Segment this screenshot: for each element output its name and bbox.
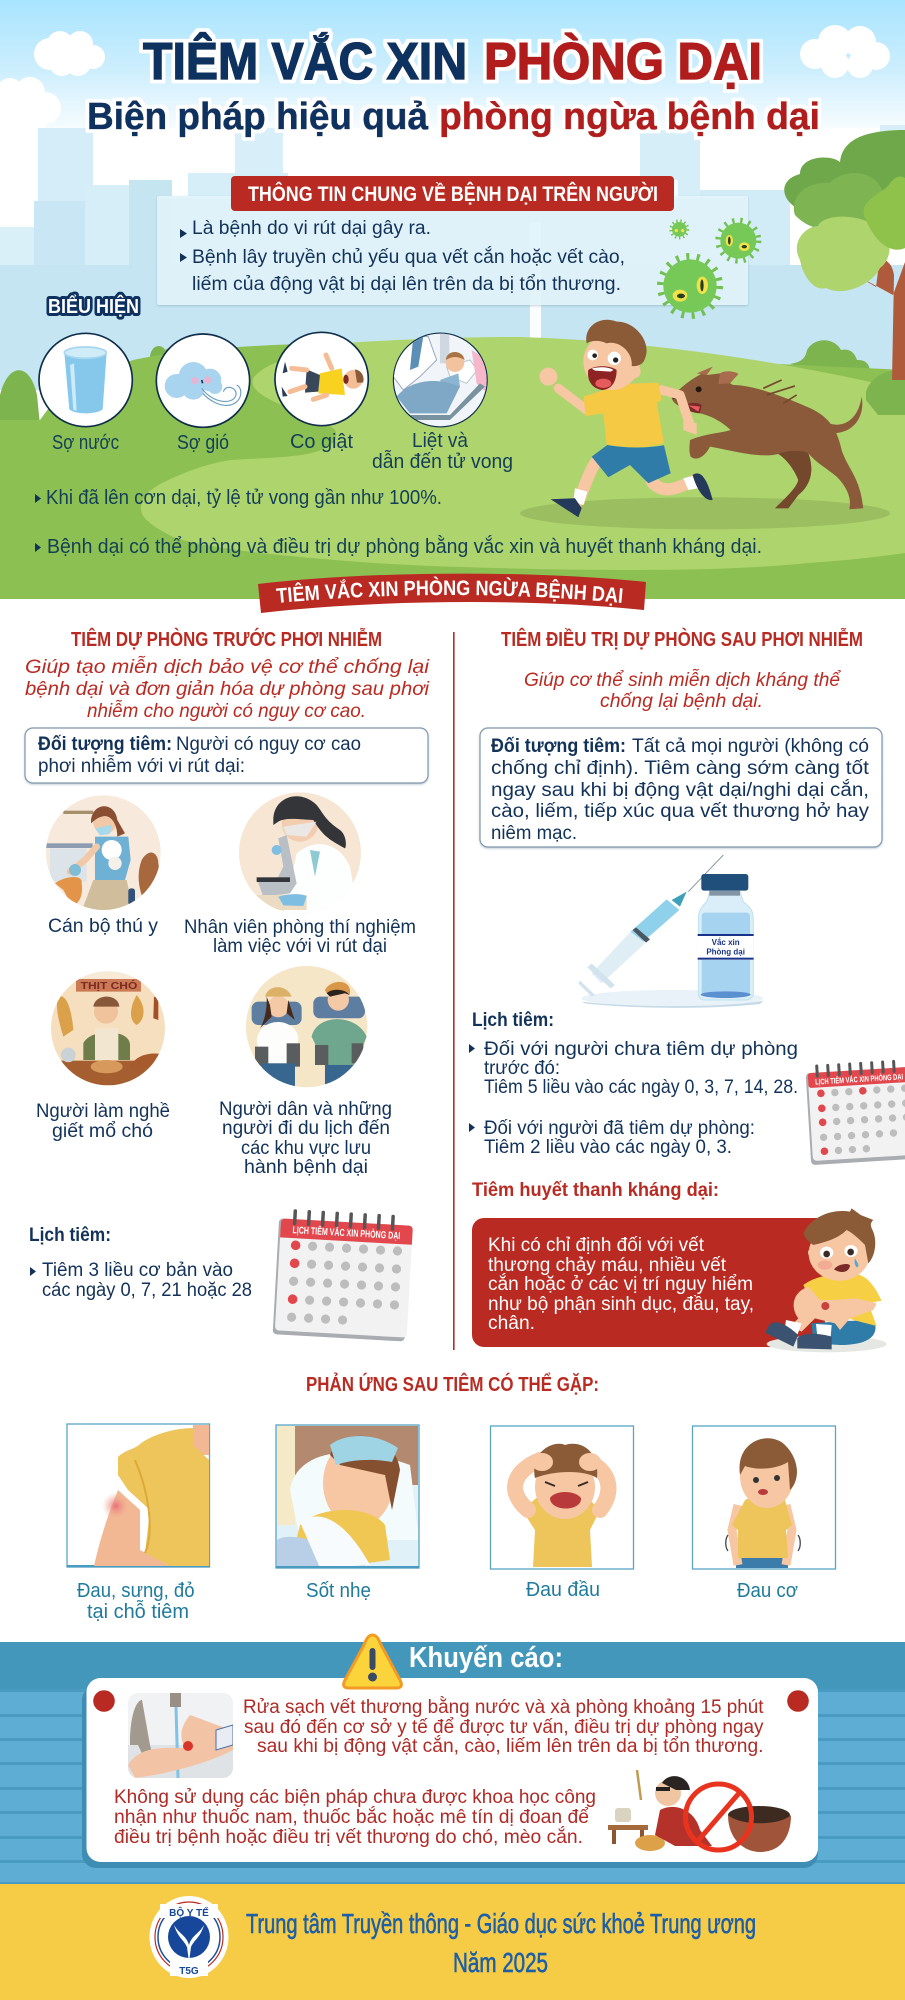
icon: warning triangle [344, 1635, 401, 1688]
callout: rabies immune globulin: thương chảy máu, nhiều vết [488, 1255, 727, 1276]
people at risk labels: người đi du lịch đến [222, 1118, 390, 1139]
reaction: injection site: Đau, sưng, đỏ [77, 1580, 194, 1602]
schedule: pre-exposure [29, 1225, 252, 1301]
illustration: shaman and forbidden remedy [608, 1770, 791, 1852]
title: TIÊM VẮC XIN [143, 32, 467, 91]
callout: rabies immune globulin: Tiêm huyết thanh kháng dại: [472, 1180, 719, 1201]
text: avoid unproven remedies: điều trị bệnh hoặc điều trị vết thương do chó, mèo cắn. [114, 1826, 583, 1848]
people at risk labels: Cán bộ thú y [48, 916, 158, 937]
icon: paralysis patient in bed [393, 333, 487, 427]
schedule: post-exposure: Đối với người chưa tiêm dự phòng [484, 1039, 798, 1060]
logo: Ministry of Health: BỘ Y TẾ [169, 1906, 209, 1919]
white content background [0, 599, 905, 1642]
illustration: boy running [539, 320, 713, 517]
symptoms row [39, 332, 487, 427]
icon: water glass [39, 333, 132, 427]
schedule: pre-exposure: các ngày 0, 7, 21 hoặc 28 [42, 1280, 252, 1301]
callout: rabies immune globulin: chân. [488, 1313, 535, 1334]
people at risk labels: làm việc với vi rút dại [213, 936, 387, 957]
footer: Năm 2025 [453, 1947, 548, 1978]
text: wash wound: sau đó đến cơ sở y tế để được tư vấn, điều trị dự phòng ngay [244, 1717, 764, 1738]
text: avoid unproven remedies: Không sử dụng các biện pháp chưa được khoa học công [114, 1787, 596, 1808]
schedule: pre-exposure: Tiêm 3 liều cơ bản vào [42, 1260, 233, 1281]
icon: viruses [661, 221, 758, 315]
illustration: crying boy [765, 1208, 887, 1352]
schedule: post-exposure: Tiêm 2 liều vào các ngày 0, 3. [484, 1137, 732, 1158]
text: avoid unproven remedies: nhận như thuốc nam, thuốc bắc hoặc mê tín dị đoan để [114, 1806, 589, 1828]
clouds [0, 25, 890, 128]
people at risk labels: Nhân viên phòng thí nghiệm [184, 917, 416, 938]
illustration: dog [671, 367, 863, 509]
people at risk labels: các khu vực lưu [241, 1138, 371, 1159]
reaction: headache [490, 1426, 634, 1601]
icon: calendar right [805, 1058, 905, 1165]
illustration: lab worker [237, 790, 363, 917]
panel: pre-exposure prophylaxis: Giúp tạo miễn dịch bảo vệ cơ thể chống lại [25, 657, 430, 678]
people at risk illustrations [43, 790, 370, 1090]
panel: general information: Bệnh lây truyền chủ yếu qua vết cắn hoặc vết cào, [192, 246, 625, 268]
reaction: injection site [67, 1424, 210, 1623]
vial [698, 874, 754, 1000]
callout: rabies immune globulin [472, 1180, 825, 1347]
heading: symptoms: BIỂU HIỆN [48, 294, 139, 318]
panel: post-exposure prophylaxis: chống lại bệnh dại. [600, 691, 763, 712]
panel: pre-exposure prophylaxis: Đối tượng tiêm: [38, 734, 172, 755]
illustration: dog biting boy [520, 320, 890, 529]
icon: calendar left [273, 1208, 413, 1342]
symptom labels: Liệt và [412, 430, 469, 452]
symptom labels: Sợ gió [177, 432, 229, 454]
section: recommendations background [0, 1642, 905, 1885]
illustration: veterinarian [43, 793, 163, 913]
schedule: post-exposure [469, 1010, 798, 1158]
panel: post-exposure prophylaxis: Giúp cơ thể sinh miễn dịch kháng thể [524, 670, 841, 691]
heading: recommendations: Khuyến cáo: [409, 1642, 563, 1674]
panel: post-exposure prophylaxis: niêm mạc. [491, 823, 577, 844]
panel: pre-exposure prophylaxis: TIÊM DỰ PHÒNG TRƯỚC PHƠI NHIỄM [71, 627, 382, 651]
banner: vaccination heading: TIÊM VẮC XIN PHÒNG NGỪA BỆNH DẠI [276, 576, 623, 606]
panel: post-exposure prophylaxis: Đối tượng tiêm: [491, 736, 626, 757]
callout: rabies immune globulin: cắn hoặc ở các vị trí nguy hiểm [488, 1273, 753, 1295]
symptom labels [52, 430, 513, 473]
illustration: travellers [243, 963, 370, 1090]
panel: recommendations card [82, 1678, 818, 1868]
panel: pre-exposure prophylaxis: phơi nhiễm với vi rút dại: [38, 755, 245, 777]
symptom labels: Co giật [290, 431, 353, 453]
text: wash wound: sau khi bị động vật cắn, cào, liếm lên trên da bị tổn thương. [257, 1735, 764, 1757]
note: prevention: Bệnh dại có thể phòng và điều trị dự phòng bằng vắc xin và huyết thanh kháng dại. [47, 535, 762, 558]
reaction: muscle pain: Đau cơ [737, 1580, 798, 1602]
icon: calendar left: LỊCH TIÊM VẮC XIN PHÒNG DẠI [292, 1223, 401, 1242]
text: wash wound [243, 1696, 764, 1757]
panel: post-exposure prophylaxis: ngay sau khi bị động vật dại/nghi dại cắn, [491, 779, 869, 801]
footer [0, 1884, 905, 2000]
subtitle [87, 96, 820, 138]
text: avoid unproven remedies [114, 1787, 596, 1848]
symptom labels: Sợ nước [52, 432, 119, 454]
panel: general information [157, 176, 748, 305]
panel: post-exposure prophylaxis: chống chỉ định). Tiêm càng sớm càng tốt [491, 758, 870, 779]
illustration: syringe and vaccine vial [578, 855, 763, 1008]
reaction: injection site: tại chỗ tiêm [87, 1600, 189, 1623]
schedule: post-exposure: Lịch tiêm: [472, 1010, 554, 1031]
panel: pre-exposure prophylaxis: bệnh dại và đơn giản hóa dự phòng sau phơi [25, 679, 430, 700]
section: adverse reactions heading: PHẢN ỨNG SAU TIÊM CÓ THỂ GẶP: [306, 1372, 599, 1396]
vial: Vắc xin [712, 938, 740, 947]
logo: Ministry of Health: T5G [179, 1966, 199, 1977]
panel: pre-exposure prophylaxis: nhiễm cho người có nguy cơ cao. [87, 701, 366, 722]
background: sky and city [0, 0, 905, 390]
subtitle: phòng ngừa bệnh dại [439, 96, 820, 138]
symptom labels: dẫn đến tử vong [372, 450, 513, 473]
panel: pre-exposure prophylaxis [25, 627, 430, 783]
icon: wind cloud [156, 334, 250, 427]
schedule: pre-exposure: Lịch tiêm: [29, 1225, 111, 1246]
reaction: muscle pain [692, 1426, 836, 1602]
panel: general information: Là bệnh do vi rút dại gây ra. [192, 218, 431, 239]
schedule: post-exposure: Đối với người đã tiêm dự phòng: [484, 1118, 755, 1139]
panel: general information: liếm của động vật bị dại lên trên da bị tổn thương. [192, 274, 621, 295]
tree [784, 130, 905, 380]
people at risk labels: hành bệnh dại [244, 1157, 368, 1178]
people at risk labels [36, 916, 416, 1178]
panel: general information: THÔNG TIN CHUNG VỀ BỆNH DẠI TRÊN NGƯỜI [248, 182, 658, 206]
illustration: butcher [50, 970, 167, 1087]
ground: hills and bushes [0, 337, 905, 600]
logo: Ministry of Health [150, 1896, 228, 1978]
title: PHÒNG DẠI [484, 33, 762, 91]
reaction: headache: Đau đầu [526, 1579, 600, 1601]
callout: rabies immune globulin: Khi có chỉ định đối với vết [488, 1235, 705, 1256]
illustration: butcher: THỊT CHÓ [81, 979, 137, 992]
reaction: mild fever: Sốt nhẹ [306, 1580, 371, 1602]
schedule: post-exposure: trước đó: [484, 1058, 560, 1079]
people at risk labels: Người làm nghề [36, 1101, 170, 1122]
panel: post-exposure prophylaxis: cào, liếm, tiếp xúc qua vết thương hở hay [491, 801, 870, 822]
note: mortality: Khi đã lên cơn dại, tỷ lệ tử vong gần như 100%. [46, 487, 442, 509]
column divider [453, 632, 455, 1350]
callout: rabies immune globulin: như bộ phận sinh dục, đầu, tay, [488, 1294, 754, 1315]
schedule: post-exposure: Tiêm 5 liều vào các ngày 0, 3, 7, 14, 28. [484, 1077, 798, 1098]
illustration: washing wound [128, 1693, 233, 1778]
vial: Phòng dại [706, 948, 745, 957]
syringe [578, 855, 723, 997]
panel: post-exposure prophylaxis [480, 627, 882, 847]
text: wash wound: Rửa sạch vết thương bằng nước và xà phòng khoảng 15 phút [243, 1696, 764, 1718]
panel: post-exposure prophylaxis: Tất cả mọi người (không có [632, 736, 869, 757]
title [143, 32, 762, 91]
icon: convulsions [275, 332, 368, 426]
reaction: mild fever [276, 1425, 419, 1602]
panel: pre-exposure prophylaxis: Người có nguy cơ cao [176, 734, 361, 755]
people at risk labels: Người dân và những [219, 1099, 392, 1120]
people at risk labels: giết mổ chó [52, 1121, 153, 1142]
subtitle: Biện pháp hiệu quả [87, 96, 429, 138]
